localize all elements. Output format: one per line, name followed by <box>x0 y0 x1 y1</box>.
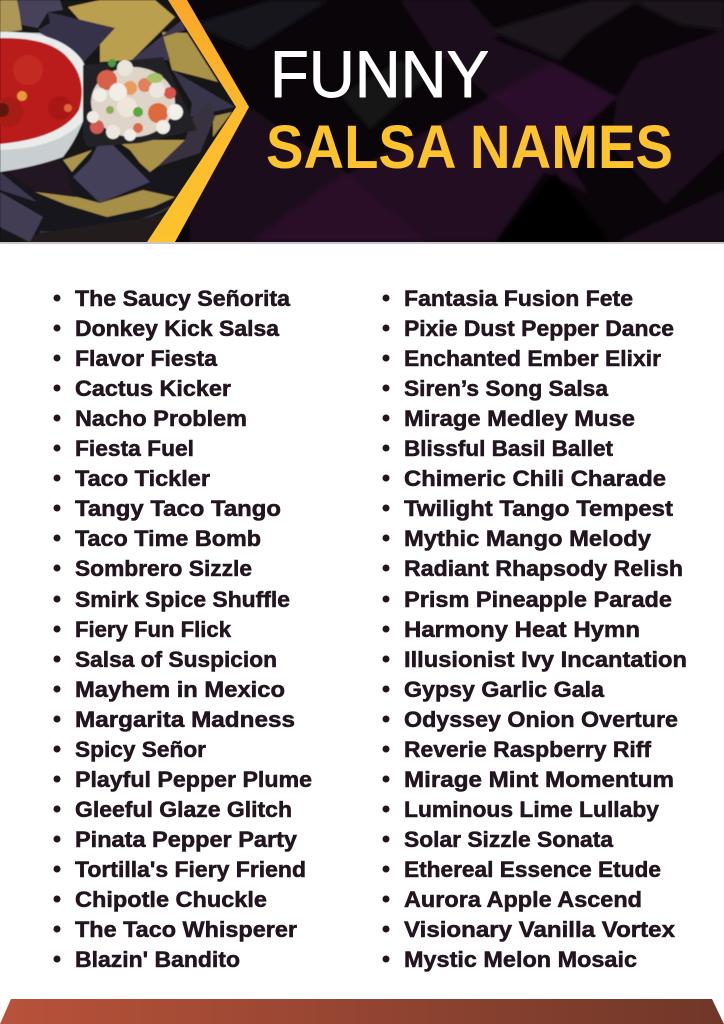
item: Visionary Vanilla Vortex <box>404 917 676 942</box>
item: Margarita Madness <box>75 707 295 732</box>
yellow chips <box>68 0 175 62</box>
item: Gypsy Garlic Gala <box>404 677 604 702</box>
item: Chipotle Chuckle <box>75 887 267 912</box>
item: Cactus Kicker <box>75 376 231 401</box>
red salsa <box>0 38 82 144</box>
white salsa bowl <box>0 32 91 172</box>
dark geometric background <box>0 0 724 242</box>
plate <box>0 170 200 236</box>
title <box>268 51 671 168</box>
name list: right column <box>382 286 687 972</box>
item: Flavor Fiesta <box>75 346 217 371</box>
item: Playful Pepper Plume <box>75 767 312 792</box>
item: Pinata Pepper Party <box>75 827 297 852</box>
item: Reverie Raspberry Riff <box>404 737 652 762</box>
item: Gleeful Glaze Glitch <box>75 797 292 822</box>
item: Nacho Problem <box>75 406 247 431</box>
item: Siren’s Song Salsa <box>404 376 608 401</box>
pico de gallo dish <box>83 57 197 147</box>
yellow chevron frame <box>147 0 249 242</box>
item: Chimeric Chili Charade <box>404 466 666 491</box>
item: Fantasia Fusion Fete <box>404 286 633 311</box>
item: Twilight Tango Tempest <box>404 496 674 521</box>
item: Spicy Señor <box>75 737 206 762</box>
item: Solar Sizzle Sonata <box>404 827 613 852</box>
item: Enchanted Ember Elixir <box>404 346 661 371</box>
item: Fiesta Fuel <box>75 436 194 461</box>
item: Fiery Fun Flick <box>75 617 231 642</box>
name list: left column <box>54 286 312 972</box>
title line: SALSA NAMES: SALSA NAMES <box>266 113 673 181</box>
item: Blazin' Bandito <box>75 947 240 972</box>
title line: FUNNY: FUNNY <box>270 37 489 111</box>
item: Mirage Medley Muse <box>404 406 635 431</box>
header banner <box>0 0 724 242</box>
footer bar <box>0 999 724 1024</box>
item: Tortilla's Fiery Friend <box>75 857 306 882</box>
item: Ethereal Essence Etude <box>404 857 661 882</box>
item: Taco Tickler <box>75 466 210 491</box>
item: The Taco Whisperer <box>75 917 297 942</box>
item: Salsa of Suspicion <box>75 647 277 672</box>
item: Mythic Mango Melody <box>404 526 652 551</box>
item: Taco Time Bomb <box>75 526 261 551</box>
item: Prism Pineapple Parade <box>404 587 672 612</box>
item: Illusionist Ivy Incantation <box>404 647 687 672</box>
item: Pixie Dust Pepper Dance <box>404 316 674 341</box>
item: Smirk Spice Shuffle <box>75 587 290 612</box>
item: Donkey Kick Salsa <box>75 316 279 341</box>
item: Mirage Mint Momentum <box>404 767 674 792</box>
item: Mayhem in Mexico <box>75 677 285 702</box>
item: Luminous Lime Lullaby <box>404 797 659 822</box>
item: Blissful Basil Ballet <box>404 436 613 461</box>
item: Mystic Melon Mosaic <box>404 947 637 972</box>
item: Radiant Rhapsody Relish <box>404 556 683 581</box>
item: The Saucy Señorita <box>75 286 290 311</box>
item: Tangy Taco Tango <box>75 496 281 521</box>
header bottom edge <box>0 242 724 244</box>
food photo: salsa and nachos <box>0 0 240 242</box>
blue corn chips <box>17 0 63 28</box>
item: Harmony Heat Hymn <box>404 617 640 642</box>
item: Odyssey Onion Overture <box>404 707 678 732</box>
item: Sombrero Sizzle <box>75 556 252 581</box>
item: Aurora Apple Ascend <box>404 887 642 912</box>
